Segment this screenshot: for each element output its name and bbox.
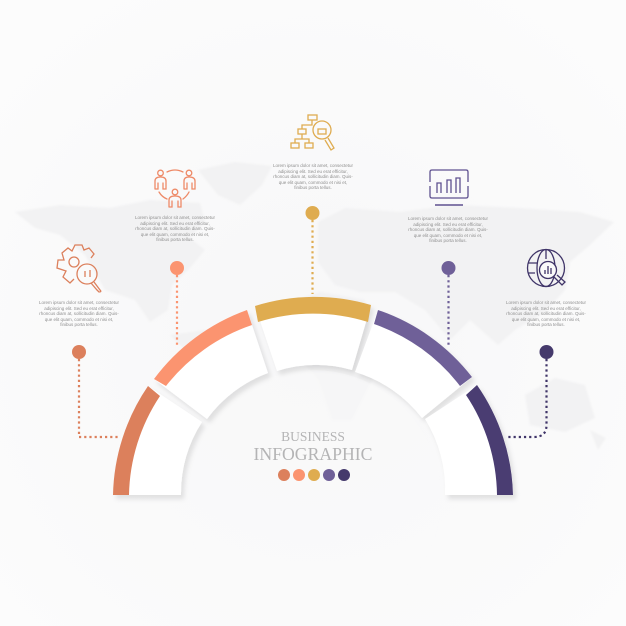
text block 1: Lorem ipsum dolor sit amet, consectetur <box>39 300 119 305</box>
segment 2: colored band <box>154 310 252 386</box>
segment 4: white card <box>355 310 472 418</box>
icon: globe with magnifier <box>528 250 565 286</box>
text block 1: finibus porta tellus. <box>60 322 98 327</box>
text block 4: adipiscing elit. Sed eu erat efficitur, <box>413 222 483 226</box>
connector 1 <box>79 359 118 437</box>
text block 5: finibus porta tellus. <box>527 322 565 327</box>
marker 3 <box>306 206 320 220</box>
icon: flowchart with magnifier <box>291 115 334 150</box>
text block 2: que elit quam, commodo et nisi et, <box>141 232 209 236</box>
semicircle diagram <box>113 297 513 495</box>
segment 5: colored band <box>466 385 513 495</box>
text block 1: adipiscing elit. Sed eu erat efficitur, <box>44 306 114 310</box>
title: BUSINESS <box>281 429 345 444</box>
connector 4 <box>447 275 450 345</box>
segment 3: colored band <box>255 297 371 322</box>
text block 5 <box>506 300 586 327</box>
text block 4: Lorem ipsum dolor sit amet, consectetur <box>408 216 488 221</box>
text block 3: adipiscing elit. Sed eu erat efficitur, <box>278 168 348 174</box>
text block 2: adipiscing elit. Sed eu erat efficitur, <box>140 220 210 226</box>
text block 2 <box>135 215 215 242</box>
text block 2: rhoncus diam at, sollicitudin diam. Quis- <box>135 226 215 231</box>
text block 2: Lorem ipsum dolor sit amet, consectetur <box>135 215 215 220</box>
marker 1 <box>72 345 86 359</box>
text block 4: que elit quam, commodo et nisi et, <box>414 232 482 238</box>
text block 3: rhoncus diam at, sollicitudin diam. Quis- <box>273 174 353 179</box>
text block 5: adipiscing elit. Sed eu erat efficitur, <box>511 306 581 310</box>
text block 3: que elit quam, commodo et nisi et, <box>279 180 347 184</box>
text block 3: Lorem ipsum dolor sit amet, consectetur <box>273 163 353 168</box>
segment 5: white card <box>425 385 513 495</box>
text block 4 <box>408 216 488 243</box>
inner circle glow <box>185 370 441 626</box>
text block 1: rhoncus diam at, sollicitudin diam. Quis- <box>39 311 119 316</box>
text block 3 <box>273 163 353 190</box>
marker 5 <box>540 345 554 359</box>
marker 4 <box>442 261 456 275</box>
world map <box>15 162 614 450</box>
text block 1: que elit quam, commodo et nisi et, <box>45 316 113 322</box>
icon: gear with magnifier <box>57 245 101 292</box>
segment 1: colored band <box>113 386 160 495</box>
segment 2: white card <box>154 310 268 419</box>
marker 2 <box>170 261 184 275</box>
text block 1 <box>39 300 119 327</box>
text block 5: rhoncus diam at, sollicitudin diam. Quis- <box>506 311 586 316</box>
text block 4: finibus porta tellus. <box>429 238 467 243</box>
text block 5: que elit quam, commodo et nisi et, <box>512 316 580 322</box>
connector 3 <box>311 220 314 294</box>
text block 5: Lorem ipsum dolor sit amet, consectetur <box>506 300 586 305</box>
title <box>254 429 372 464</box>
text block 4: rhoncus diam at, sollicitudin diam. Quis- <box>408 227 488 232</box>
icon: monitor chart <box>430 170 468 205</box>
text block 3: finibus porta tellus. <box>294 185 332 190</box>
segment 3: white card <box>255 297 371 371</box>
segment 1: white card <box>113 386 202 495</box>
segment 4: colored band <box>374 310 472 386</box>
connector 2 <box>176 275 178 347</box>
icon: people circle <box>155 170 195 207</box>
legend dots <box>278 469 350 481</box>
title: INFOGRAPHIC <box>254 444 372 464</box>
connector 5 <box>507 359 546 437</box>
text block 2: finibus porta tellus. <box>156 237 194 242</box>
